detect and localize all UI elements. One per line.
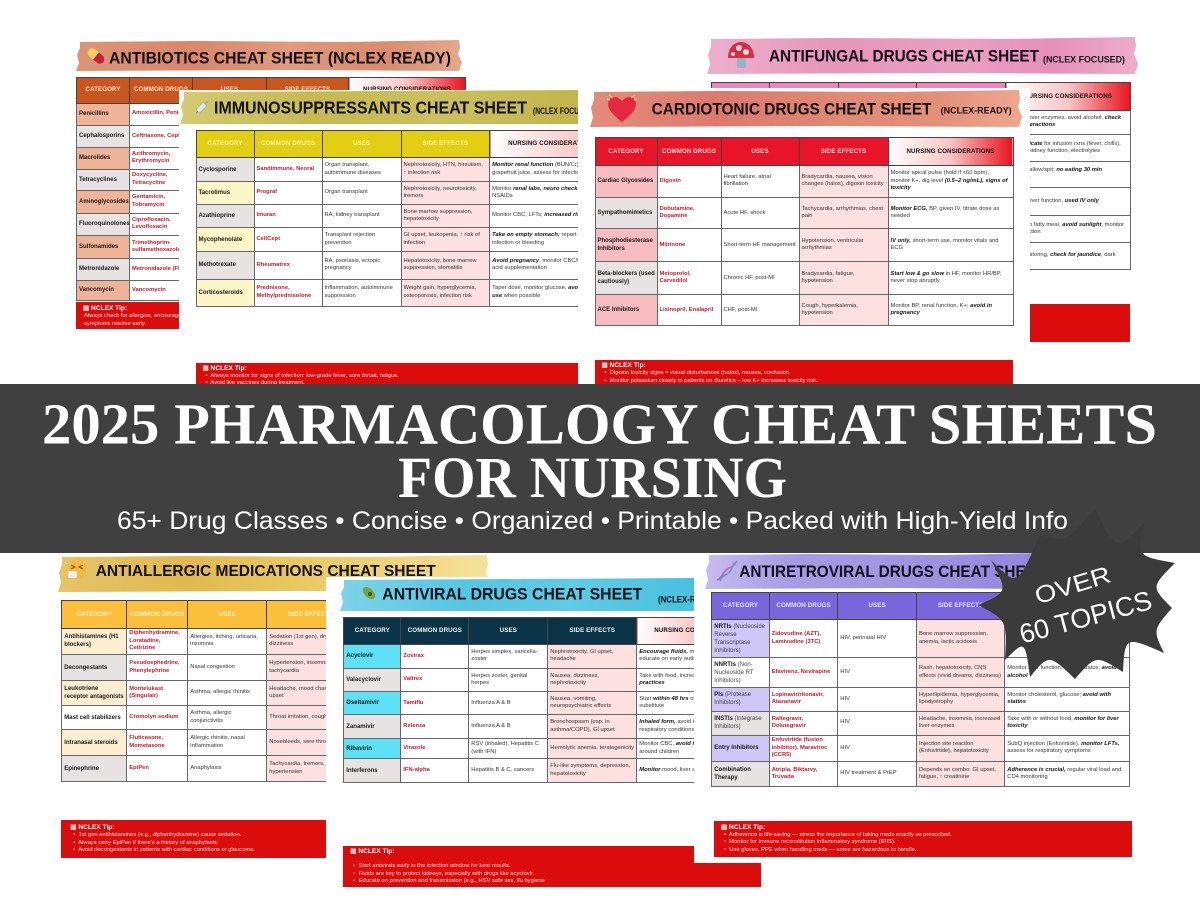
table: antibiotics: Doxycycline, Tetracycline [132,172,167,186]
table: antiviral: Valtrex [403,676,422,682]
banner: cardiotonic [590,90,1022,127]
table: antiretroviral: Lopinavir/ritonavir, Atazanavir [772,692,824,705]
table: antiretroviral: Atripla, Biktarvy, Truvada [772,767,817,780]
table: antibiotics: Penicillins [79,111,109,117]
table: antifungal: CATEGORY [723,93,758,100]
table: immunosuppressants: Organ transplant, autoimmune diseases [324,162,381,176]
table: cardiotonic: ACE Inhibitors [598,307,639,313]
table: immunosuppressants: Cyclosporine [198,167,237,173]
table: antibiotics: Tetracyclines [79,177,117,183]
heading: main title: 2025 PHARMACOLOGY CHEAT SHEETS [42,392,1157,456]
table: antiviral: practices [639,680,665,686]
table: antiretroviral: HIV treatment & PrEP [840,770,897,776]
table: antiviral: IFN-alpha [403,767,430,773]
callout: antiallergic NCLEX tip [61,820,326,858]
callout: antiretroviral NCLEX tip: • Adherence is life-saving — stress the importance of taking meds exactly as prescribed. [724,832,952,838]
callout: cardiotonic NCLEX tip [594,360,1012,390]
badge text: OVER [1032,562,1114,610]
table: immunosuppressants: use when possible [492,293,540,299]
callout: antiviral NCLEX tip: • Start antivirals early in the infection window for best results. [353,863,511,869]
callout: antiallergic NCLEX tip: • 1st gen antihistamines (e.g., diphenhydramine) cause sedation. [73,832,241,838]
icon: DNA strand [716,560,738,582]
table: antiallergic: Throat irritation, cough [269,714,326,720]
table: antibiotics: NURSING CONSIDERATIONS [363,86,451,93]
table: antiretroviral: Enfuvirtide (fusion inhibitor), Maraviroc (CCR5) [772,737,827,758]
callout: antiretroviral NCLEX tip: • Use gloves, PPE when handling meds — some are hazardous to handle. [724,847,916,853]
table: antiretroviral: INSTIs (Integrase Inhibitors) [714,716,762,730]
badge text: 60 TOPICS [1016,585,1155,649]
table: antiretroviral: Bone marrow suppression, anemia, lactic acidosis [919,631,988,645]
table: antifungal: Monitor liver enzymes, avoid alcohol, check [1008,115,1121,121]
callout: antibiotics NCLEX tip: Always check for allergies, encourage [84,313,179,319]
table: antiviral: Herpes simplex, varicella-zoster [471,649,538,662]
table: immunosuppressants: acid supplementation [492,265,547,271]
table: immunosuppressants: Organ transplant [324,189,368,195]
table: antiallergic: Antihistamines (H1 blockers) [64,634,119,648]
callout: antibiotics NCLEX tip [76,302,179,329]
table: antifungal: Take with fatty meal, avoid sunlight, monitor [1008,222,1124,228]
icon: virus [362,586,376,600]
table: immunosuppressants: Methotrexate [198,262,236,268]
table: antibiotics: Aminoglycosides [79,199,129,205]
table: antiviral: Hemolytic anemia, teratogenicity [550,745,634,751]
table: antifungal: liver function [1008,229,1041,235]
table: immunosuppressants: Prednisone, Methylprednisolone [256,285,311,299]
table: antiviral: Interferons [346,768,378,774]
table: antibiotics: SIDE EFFECTS [285,86,330,93]
table: antibiotics [76,77,466,301]
table: cardiotonic: monitor K+, dig level (0.5–2 ng/mL), signs of [890,178,1008,184]
table: antiallergic: Fluticasone, Mometasone [129,735,165,749]
table: antiallergic: Pseudoephedrine, Phenylephrine [129,660,180,674]
callout: antiallergic NCLEX tip: ▤ NCLEX Tip: [70,824,115,831]
table: antiviral [343,617,694,783]
table: antibiotics: Metronidazole (Flagyl) [132,266,192,272]
table: antiviral: Hepatitis B & C, cancers [471,767,534,773]
table: cardiotonic: toxicity [890,185,911,191]
table: antiviral: Influenza A & B [471,723,511,729]
panel: immunosuppressants cheat sheet [179,90,578,384]
table: antiallergic: Allergic rhinitis, nasal inflammation [190,735,245,749]
table: antiretroviral: HIV, perinatal HIV [840,635,886,641]
subtitle: 65+ Drug Classes • Concise • Organized • Printable • Packed with High-Yield Info [117,507,1068,535]
icon: heart [606,94,638,122]
table: antiretroviral: Entry Inhibitors [714,745,759,751]
table: antiretroviral: USES [868,602,886,609]
table: antiretroviral: NRTIs (Nucleoside Reverse Transcriptase Inhibitors) [714,624,765,654]
callout: cardiotonic NCLEX tip: • Monitor potassium closely in patients on diuretics – low K+ increases toxicity risk. [604,378,818,384]
icon: mushroom [728,42,754,68]
table: antiviral: Flu-like symptoms, depression, hepatotoxicity [550,763,630,777]
table: antifungal [711,82,1131,270]
table: antiretroviral: SubQ injection (Enfuvirtide), monitor LFTs, assess for respiratory symptoms [1007,741,1120,754]
table: antiretroviral: Combination Therapy [714,767,751,781]
table: antiviral: Herpes zoster, genital herpes [471,673,527,686]
callout: immunosuppressants NCLEX tip [196,363,578,393]
table: immunosuppressants: CellCept [256,236,280,242]
table: antiallergic: Diphenhydramine, Loratadine, Cetirizine [129,630,180,651]
table: antiallergic: Tachycardia, tremors, hypertension [269,761,325,775]
table: cardiotonic: Monitor apical pulse (hold if <60 bpm), [890,170,989,176]
table: antiretroviral: HIV [840,719,850,725]
banner: antiallergic [58,555,488,592]
table: antiretroviral: Zidovudine (AZT), Lamivudine (3TC) [772,631,821,645]
table: antifungal: Must swallow/spit; no eating 30 min [1008,167,1102,173]
table: antiallergic: Nasal congestion [190,664,235,670]
table: cardiotonic: cautiously) [598,279,629,285]
table: antibiotics: Metronidazole [79,266,119,272]
table: cardiotonic: Heart failure, atrial fibrillation [724,174,771,187]
table: antiretroviral: Monitor CBC, take as prescribed [1007,635,1091,641]
table: cardiotonic: Bradycardia, fatigue, hypotension [802,271,855,284]
callout: antiallergic NCLEX tip: • Always carry EpiPen if there's a history of anaphylaxis. [73,840,219,846]
panel: antibiotics cheat sheet [76,40,466,329]
table: antifungal: USES [869,93,886,100]
table: cardiotonic: Lisinopril, Enalapril [660,307,713,313]
banner: antiretroviral [705,553,1045,589]
table: antibiotics: USES [221,86,238,93]
panel: antifungal cheat sheet [707,37,1138,342]
table: cardiotonic: Monitor BP, renal function, K+; avoid in pregnancy [890,303,992,316]
heading: antifungal title: (NCLEX FOCUSED) [1043,54,1125,64]
heading: main title [42,392,1157,510]
table: immunosuppressants: Inflammation, autoimmune suppression [324,285,393,299]
heading: cardiotonic title: (NCLEX-READY) [941,106,1012,116]
table: immunosuppressants: USES [353,140,370,147]
banner: antifungal [707,37,1138,74]
table: immunosuppressants: Rheumatrex [256,262,290,268]
table: immunosuppressants: CATEGORY [207,140,243,147]
table: antiretroviral: Hyperlipidemia, hyperglycemia, lipodystrophy [919,692,1000,705]
table: cardiotonic: Beta-blockers (used [598,271,655,277]
table: immunosuppressants: Weight gain, hyperglycemia, osteoporosis, infection risk [404,285,476,299]
table: antiviral: Nausea, vomiting, neuropsychiatric effects [550,696,611,709]
table: antibiotics: Vancomycin [79,287,114,293]
table: antiallergic: Decongestants [64,665,107,671]
table: antiretroviral: HIV [840,669,850,675]
heading: immunosuppressants title: IMMUNOSUPPRESSANTS CHEAT SHEET [214,98,527,118]
table: antiviral: around children [639,749,679,755]
table: immunosuppressants: RA, kidney transplant [324,212,380,218]
table: antiviral: Zovirax [403,653,424,659]
table: cardiotonic: Metoprolol, Carvedilol [660,271,691,284]
table: cardiotonic: Sympathomimetics [598,210,653,216]
heading: antiallergic title: ANTIALLERGIC MEDICATIONS CHEAT SHEET [96,563,436,580]
table: immunosuppressants: Nephrotoxicity, neurotoxicity, tremors [404,186,477,199]
table: antiretroviral: HIV [840,696,850,702]
table: antifungal: NURSING CONSIDERATIONS [1024,93,1112,100]
table: antiviral: RSV (inhaled), Hepatitis C (with IFN) [471,741,539,755]
callout: antiretroviral NCLEX tip: ▤ NCLEX Tip: [721,824,765,831]
table: antiretroviral: SIDE EFFECTS [938,602,983,609]
table: immunosuppressants: Corticosteroids [198,290,243,296]
table: cardiotonic: Cardiac Glycosides [598,178,653,184]
table: antiretroviral: Depends on combo: GI upset, fatigue, ↑ creatinine [919,767,996,780]
title band [0,384,1200,553]
callout: antiretroviral NCLEX tip: • Monitor for immune reconstitution inflammatory syndrome (IRIS). [724,839,895,845]
table: antiviral: USES [500,627,517,634]
table: antiviral: substitute [639,703,664,709]
table: antifungal: LFT monitoring, check for jaundice, dark [1008,252,1116,258]
callout: antiviral NCLEX tip: • Educate on prevention and transmission (e.g., HSV safe sex, flu hygiene [353,878,545,884]
table: antiallergic: Mast cell stabilizers [64,715,121,721]
table: cardiotonic: Hypotension, ventricular arrhythmias [802,238,864,251]
callout: antifungal NCLEX tip [711,304,1130,342]
icon: syringe [196,100,208,114]
table: immunosuppressants: infection or bleeding [492,240,544,246]
table: antibiotics: Vancomycin [132,287,166,293]
table: immunosuppressants: Tacrolimus [198,190,230,196]
callout: immunosuppressants NCLEX tip: • Always monitor for signs of infection: low-grade fever, sore throat, fatigue. [206,373,399,379]
banner: immunosuppressants [180,90,578,124]
table: cardiotonic: Bradycardia, nausea, vision changes (halos), digoxin toxicity [802,174,884,187]
table: antiallergic: Cromolyn sodium [129,714,179,720]
table: cardiotonic: CATEGORY [608,148,644,155]
callout: antiviral NCLEX tip: ▤ NCLEX Tip: [350,848,395,855]
table: antiretroviral: Efavirenz, Nevirapine [772,669,830,675]
table: cardiotonic: NURSING CONSIDERATIONS [906,148,995,155]
table: cardiotonic [595,137,1014,326]
table: antiviral: Oseltamivir [346,700,379,706]
table: cardiotonic: IV only, short-term use, monitor vitals and ECG [890,238,999,251]
table: antiviral: Ribavirin [346,746,372,752]
table: antiallergic: Asthma, allergic conjunctivitis [190,710,232,724]
table: antiallergic: Allergies, itching, urticaria, insomnia [190,634,258,647]
table: antiretroviral: Headache, insomnia, increased liver enzymes [919,716,1000,729]
callout: antiviral NCLEX tip: • Fluids are key to protect kidneys, especially with drugs like acyclovir. [353,871,534,877]
table: antibiotics: Macrolides [79,155,110,161]
callout: immunosuppressants NCLEX tip: • Avoid live vaccines during treatment. [206,380,305,386]
table: cardiotonic: Digoxin [660,178,681,184]
table: immunosuppressants: SIDE EFFECTS [423,140,468,147]
table: antibiotics: Fluoroquinolones [79,221,130,227]
heading: antifungal title: ANTIFUNGAL DRUGS CHEAT SHEET [769,48,1039,66]
table: antiretroviral: NURSING CONSIDERATIONS [1023,602,1111,609]
table: antibiotics: Ciprofloxacin, Levofloxacin [132,217,171,230]
callout: antiretroviral NCLEX tip [714,821,1132,857]
callout: antiviral NCLEX tip [343,846,761,887]
table: cardiotonic: Monitor ECG, BP, given IV, titrate dose as needed [890,206,999,219]
table: immunosuppressants: Bone marrow suppression, hepatotoxicity [404,209,472,222]
table: antiallergic: COMMON DRUGS [130,611,184,618]
table: antibiotics: Gentamicin, Tobramycin [132,194,165,208]
table: cardiotonic: Start low & go slow in HF, monitor HR/BP, never stop abruptly [890,271,1002,284]
table: antiviral: Acyclovir [346,653,373,659]
heading: main title: FOR NURSING [398,445,787,510]
table: antibiotics: Cephalosporins [79,133,124,139]
table: antiviral: Nausea, dizziness, nephrotoxicity [550,673,599,686]
table: antiretroviral: CATEGORY [723,602,758,609]
table: antibiotics: COMMON DRUGS [134,86,188,93]
table: antifungal: after use [1008,175,1031,181]
table: antiretroviral: Rash, hepatotoxicity, CNS effects (vivid dreams, dizziness) [919,665,1001,679]
table: cardiotonic: USES [751,148,769,155]
heading: antiviral title: ANTIVIRAL DRUGS CHEAT SHEET [382,584,643,604]
table: antiviral: Tamiflu [403,700,423,706]
table: antiretroviral: HIV [840,745,850,751]
table: antiallergic: Anaphylaxis [190,765,222,771]
table: antibiotics: Trimethoprim-sulfamethoxazole [132,240,181,253]
table: immunosuppressants [196,130,578,307]
table: immunosuppressants: Azathioprine [198,213,235,219]
table: cardiotonic: CHF, post-MI [724,307,757,313]
table: immunosuppressants: Mycophenolate [198,237,242,243]
table: cardiotonic: Milrinone [660,242,685,248]
table: antibiotics: CATEGORY [85,86,121,93]
table: immunosuppressants: Sandimmune, Neoral [256,166,314,172]
table: antiretroviral: Adherence is crucial, regular viral load and CD4 monitoring [1007,767,1121,780]
table: cardiotonic: SIDE EFFECTS [821,148,866,155]
table: antibiotics: Azithromycin, Erythromycin [132,151,170,164]
callout: immunosuppressants NCLEX tip: ▤ NCLEX Tip: [202,365,247,372]
table: antifungal: Monitor liver function, used IV only [1008,198,1099,204]
table: antiviral: SIDE EFFECTS [570,627,615,634]
table: antiretroviral: Take with or without food, monitor for liver toxicity [1007,716,1119,729]
table: immunosuppressants: Hepatotoxicity, bone marrow suppression, stomatitis [404,258,477,271]
table: antiviral: respiratory conditions [639,727,694,733]
table: antiviral: Bronchospasm (esp. in asthma/COPD), GI upset [550,719,615,733]
table: antiviral: Valacyclovir [346,677,381,683]
table: immunosuppressants: Nephrotoxicity, HTN, hirsutism, ↑ infection risk [404,162,483,176]
table: cardiotonic: Cough, hyperkalemia, hypotension [802,303,858,316]
table: antiallergic: receptor antagonists [64,694,124,700]
table: antiviral: CATEGORY [355,627,390,634]
table: immunosuppressants: GI upset, leukopenia, ↑ risk of infection [404,232,480,246]
banner: antibiotics [76,40,462,71]
table: antiviral: Nephrotoxicity, GI upset, headache [550,649,613,662]
callout: antibiotics NCLEX tip: symptoms resolve early. [84,321,146,327]
panel: antiretroviral cheat sheet [705,553,1132,857]
table: immunosuppressants: COMMON DRUGS [261,140,315,147]
table: antiretroviral: COMMON DRUGS [776,602,831,609]
table: immunosuppressants: Transplant rejection prevention [324,232,375,246]
table: immunosuppressants: NSAIDs [492,193,513,199]
table: antiretroviral [711,592,1130,787]
table: antifungal: Premedicate for infusion rxns (fever, chills), [1008,141,1121,147]
table: antifungal: SIDE EFFECTS [938,93,984,100]
table: antiretroviral: Raltegravir, Dolutegravir [772,716,806,729]
table: antiallergic: USES [219,611,236,618]
callout: antiallergic NCLEX tip: • Avoid decongestants in patients with cardiac conditions or glaucoma. [73,847,255,853]
table: immunosuppressants: RA, psoriasis, ectopic pregnancy [324,258,380,271]
icon: sneezing face [67,559,87,579]
table: antiallergic: Montelukast (Singulair) [129,686,163,699]
table: cardiotonic: Acute HF, shock [724,210,765,216]
table: antiallergic: EpiPen [129,765,149,771]
banner: antiviral [340,578,694,611]
table: cardiotonic: Short-term HF management [724,242,796,248]
table: immunosuppressants: Prograf [256,189,277,195]
table: antiretroviral: NNRTIs (Non-Nucleoside RT Inhibitors) [714,662,753,684]
table: antiviral: Virazole [403,745,425,751]
table: antifungal: drug interactions [1008,122,1055,128]
table: antiallergic [61,600,326,782]
table: antiviral: COMMON DRUGS [408,627,462,634]
callout: cardiotonic NCLEX tip: • Digoxin toxicity signs = visual disturbances (halos), nausea, confusion. [604,370,791,376]
table: antiretroviral: Monitor cholesterol, glucose; avoid with statins [1007,692,1111,705]
table: antiretroviral: Injection site reaction (Enfuvirtide), hepatotoxicity [919,741,989,754]
panel: cardiotonic cheat sheet [588,88,1030,384]
table: antiviral: Influenza A & B [471,700,511,706]
table: antiallergic: Epinephrine [64,766,99,772]
table: immunosuppressants: Imuran [256,212,276,218]
table: cardiotonic: Phosphodiesterase Inhibitors [598,238,653,252]
callout: antibiotics NCLEX tip: ▤ NCLEX Tip: [83,305,127,312]
table: antiviral: Zanamivir [346,724,375,730]
table: cardiotonic: COMMON DRUGS [662,148,716,155]
table: cardiotonic: Chronic HF, post-MI [724,275,775,281]
table: cardiotonic: Tachycardia, arrhythmias, chest pain [802,206,883,219]
panel: antiallergic cheat sheet [58,555,488,858]
heading: cardiotonic title: CARDIOTONIC DRUGS CHEAT SHEET [652,100,932,118]
table: antiallergic: Asthma, allergic rhinitis [190,689,250,695]
table: antiviral: Relenza [403,723,425,729]
icon: pill [88,48,104,64]
callout: cardiotonic NCLEX tip: ▤ NCLEX Tip: [602,362,646,369]
table: antiallergic: Intranasal steroids [64,740,118,746]
panel: antiviral cheat sheet [326,577,761,887]
table: antiretroviral: Monitor liver function, mental status; avoid alcohol [1007,665,1117,679]
table: antiallergic: Leukotriene [64,686,98,692]
table: antifungal: COMMON DRUGS [777,93,831,100]
table: antiallergic: CATEGORY [77,611,112,618]
table: antifungal: monitor kidney function, electrolytes [1008,148,1100,154]
table: cardiotonic: Dobutamine, Dopamine [660,206,695,219]
table: antiretroviral: PIs (Protease Inhibitors) [714,692,751,706]
table: antibiotics: Sulfonamides [79,244,118,250]
